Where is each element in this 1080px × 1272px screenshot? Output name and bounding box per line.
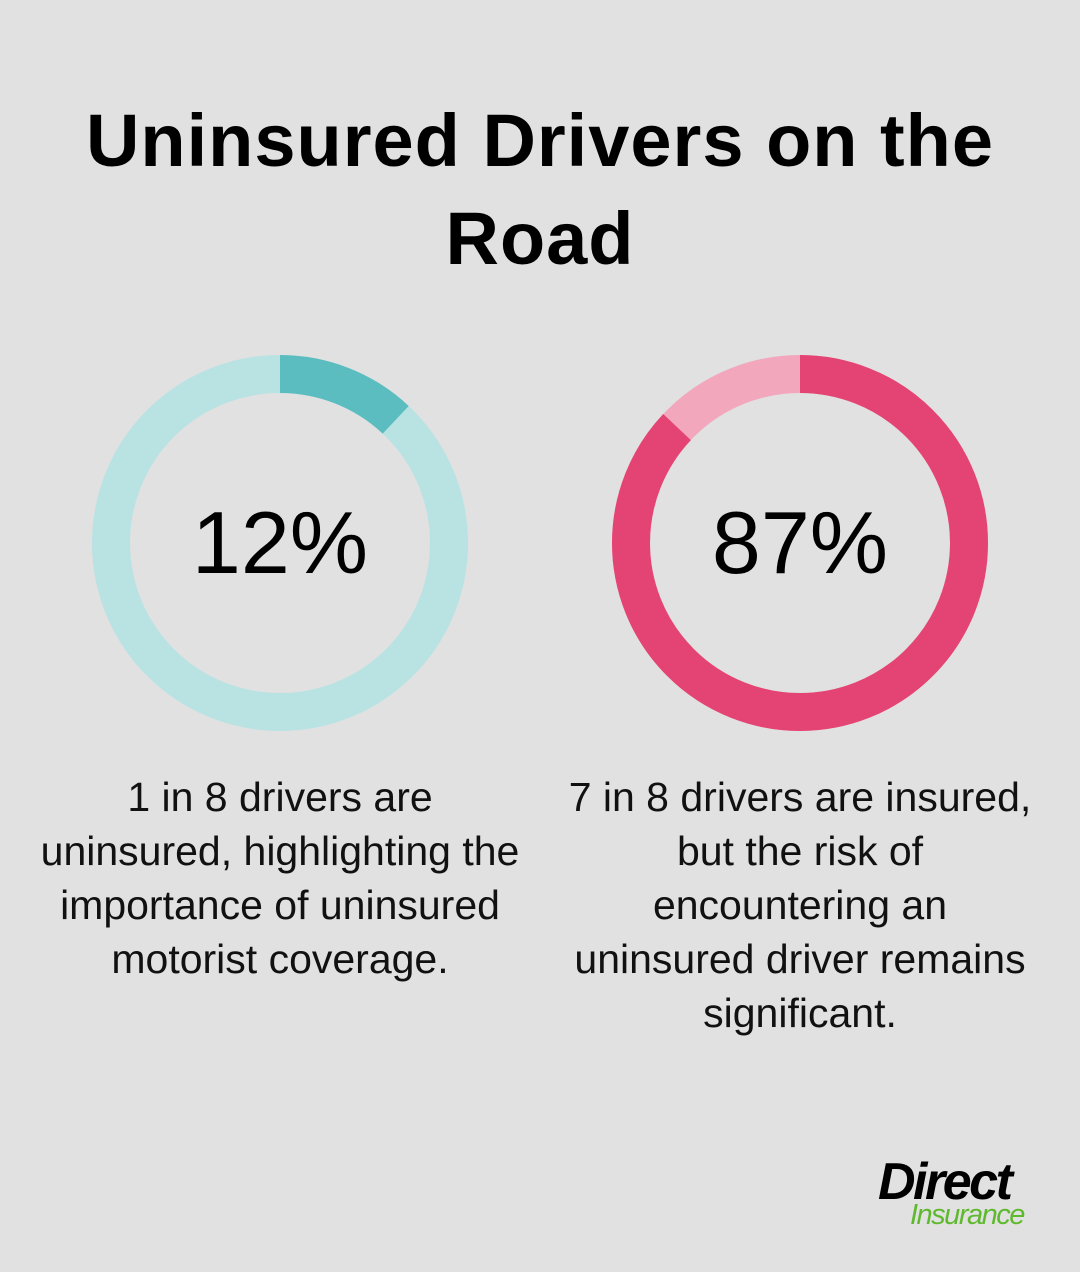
chart: right donut 87%: 87% xyxy=(712,493,888,592)
text: left description: motorist coverage. xyxy=(111,936,449,982)
title: Road xyxy=(446,197,634,280)
text: left description: importance of uninsured xyxy=(60,882,500,928)
chart: left donut 12% xyxy=(92,355,468,731)
title: Uninsured Drivers on the xyxy=(86,99,994,182)
text: left description: 1 in 8 drivers are xyxy=(127,774,433,820)
text: left description xyxy=(41,774,519,982)
text: right description: encountering an xyxy=(653,882,947,928)
logo: Direct xyxy=(878,1153,1010,1211)
text: right description: but the risk of xyxy=(677,828,923,874)
text: right description: uninsured driver remains xyxy=(574,936,1026,982)
logo xyxy=(878,1153,1024,1231)
chart: left donut 12%: 12% xyxy=(192,493,368,592)
text: right description: significant. xyxy=(703,990,897,1036)
title xyxy=(86,99,994,280)
text: right description xyxy=(569,774,1031,1036)
text: left description: uninsured, highlighting the xyxy=(41,828,519,874)
text: right description: 7 in 8 drivers are insured, xyxy=(569,774,1031,820)
chart: right donut 87% xyxy=(612,355,988,731)
logo: Insurance xyxy=(910,1199,1024,1231)
